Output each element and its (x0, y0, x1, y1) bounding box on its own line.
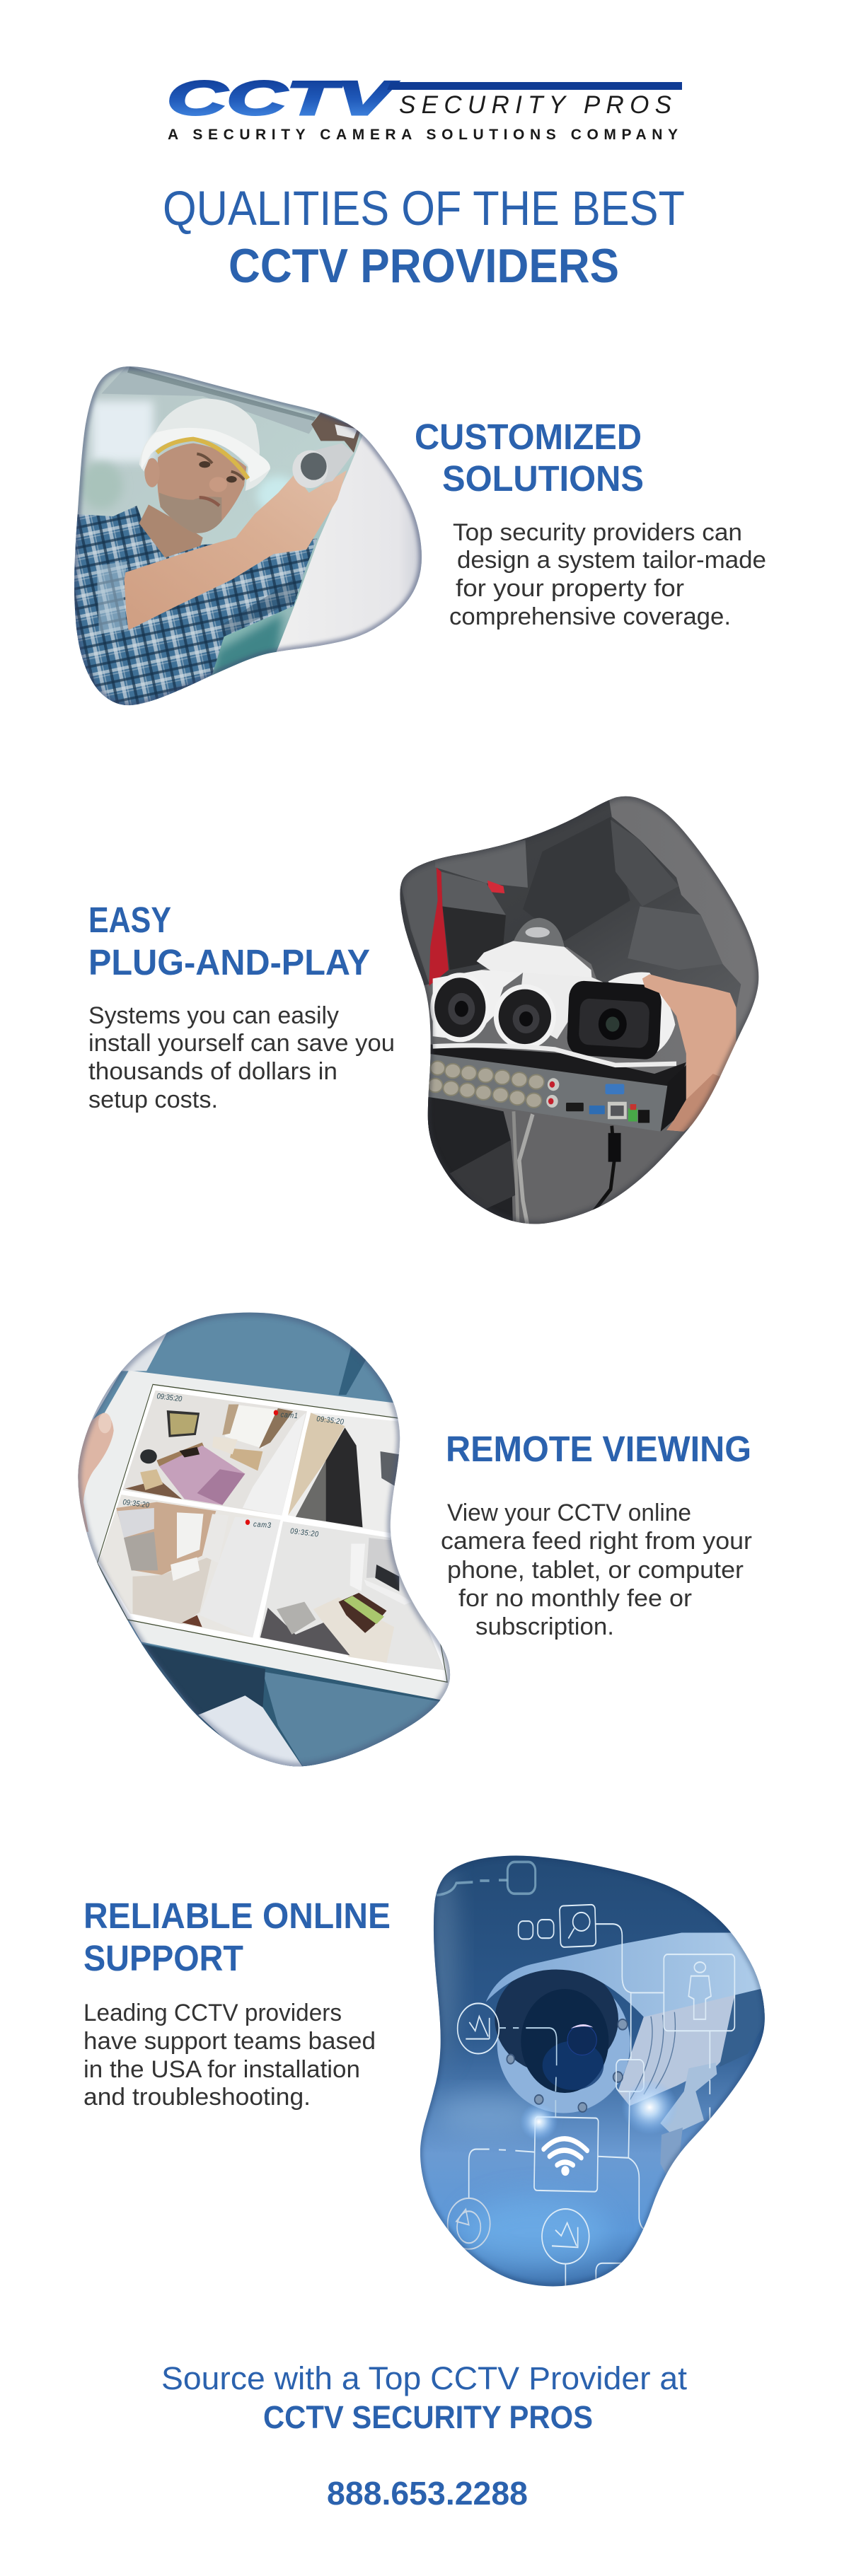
photo: digital security camera (417, 1846, 778, 2299)
pane: hallway (98, 1495, 280, 1637)
body text: phone, tablet, or computer (447, 1557, 744, 1584)
interface lines (437, 1862, 734, 2287)
body text: Top security providers can (453, 519, 742, 546)
recorder body (428, 1052, 668, 1132)
helmet (139, 398, 270, 491)
photo: technician holding cameras and recorder (400, 796, 758, 1224)
finger (78, 1412, 114, 1532)
jacket (396, 794, 741, 1010)
vignette (400, 796, 758, 1224)
light flares (520, 2080, 678, 2140)
body text: and troubleshooting. (83, 2084, 311, 2111)
recording dots (246, 1410, 278, 1525)
logo: CCTV wordmark: CCTV (167, 71, 399, 125)
panel: easy plug-and-play (88, 785, 778, 1238)
connectors (428, 1061, 544, 1108)
photo: worker installing camera (71, 354, 429, 712)
heading: SUPPORT (83, 1938, 243, 1978)
lower background and trousers (427, 1097, 689, 1224)
heading: RELIABLE ONLINE (83, 1896, 391, 1936)
box camera (608, 972, 675, 1054)
panel: reliable online support (83, 1846, 778, 2299)
heading: PLUG-AND-PLAY (88, 942, 370, 982)
logo (167, 71, 682, 143)
bullet camera one (433, 970, 523, 1040)
body text: install yourself can save you (88, 1030, 395, 1057)
body text: setup costs. (88, 1086, 218, 1113)
feed labels (122, 1393, 345, 1539)
footer company name: CCTV SECURITY PROS (263, 2399, 593, 2435)
shirt (71, 506, 317, 712)
hand (642, 974, 736, 1132)
lower denim (142, 1644, 457, 1775)
lens (521, 1989, 608, 2093)
body text: subscription. (475, 1613, 614, 1640)
heading: EASY (88, 900, 171, 940)
neck (139, 504, 203, 557)
heading (88, 900, 370, 982)
panel: customized solutions (71, 354, 766, 712)
dome camera (513, 918, 565, 947)
screws (507, 2019, 628, 2112)
white cable (433, 1045, 676, 1065)
footer line one: Source with a Top CCTV Provider at (161, 2360, 688, 2396)
feed labels: 09:35:20 (316, 1415, 345, 1427)
vignette (74, 366, 422, 705)
red placket (429, 867, 449, 986)
vignette (420, 1856, 765, 2286)
body text: for your property for (456, 575, 684, 602)
body text: camera feed right from your (441, 1528, 752, 1555)
body text: Leading CCTV providers (83, 2000, 342, 2026)
title line one: QUALITIES OF THE BEST (163, 181, 685, 236)
vignette (78, 1313, 450, 1766)
body text: View your CCTV online (447, 1499, 691, 1526)
footer call to action (161, 2360, 688, 2512)
body text: Systems you can easily (88, 1002, 339, 1029)
face (157, 443, 246, 533)
camera (311, 412, 361, 453)
title (163, 181, 685, 293)
camera body (618, 1988, 764, 2106)
rear ports (546, 1078, 649, 1123)
title line two: CCTV PROVIDERS (229, 239, 619, 293)
body text (83, 2000, 376, 2111)
hood (486, 1932, 766, 2017)
camera mount (660, 2062, 717, 2135)
arm (124, 470, 347, 631)
heading (415, 417, 644, 499)
icon: wifi (543, 2139, 587, 2173)
lens ring (497, 1975, 630, 2113)
body text: in the USA for installation (83, 2056, 360, 2083)
pane: bedroom (122, 1391, 307, 1516)
feed labels: 09:35:20 (290, 1527, 319, 1539)
logo: tagline: A SECURITY CAMERA SOLUTIONS COMPANY (168, 127, 678, 143)
body text (441, 1499, 752, 1640)
heading (83, 1896, 391, 1978)
logo: bar (387, 82, 682, 90)
footer phone: 888.653.2288 (327, 2475, 528, 2512)
feed labels: 09:35:20 (122, 1498, 150, 1510)
feed labels: cam1 (280, 1411, 298, 1420)
body text: comprehensive coverage. (449, 603, 731, 630)
body text: for no monthly fee or (458, 1585, 692, 1612)
body text (88, 1002, 395, 1113)
heading: REMOTE VIEWING (446, 1429, 751, 1469)
body text: design a system tailor-made (457, 547, 766, 574)
logo: security pros: SECURITY PROS (399, 91, 671, 119)
heading: CUSTOMIZED (415, 417, 642, 457)
feed labels: cam3 (253, 1521, 272, 1530)
feed labels: 09:35:20 (156, 1393, 183, 1404)
body text: thousands of dollars in (88, 1058, 337, 1085)
pane: kitchen (288, 1412, 402, 1533)
pane: living room (259, 1521, 445, 1670)
body text: have support teams based (83, 2028, 376, 2055)
tablet frame (71, 1371, 457, 1705)
cuff (74, 572, 129, 631)
body text (449, 519, 766, 630)
bullet camera two (518, 973, 608, 1039)
white sleeve (198, 1695, 308, 1775)
screen (97, 1384, 447, 1682)
panel: remote viewing (71, 1309, 752, 1775)
photo: tablet with camera feeds (71, 1309, 467, 1775)
heading: SOLUTIONS (442, 458, 644, 499)
wall (276, 434, 429, 660)
